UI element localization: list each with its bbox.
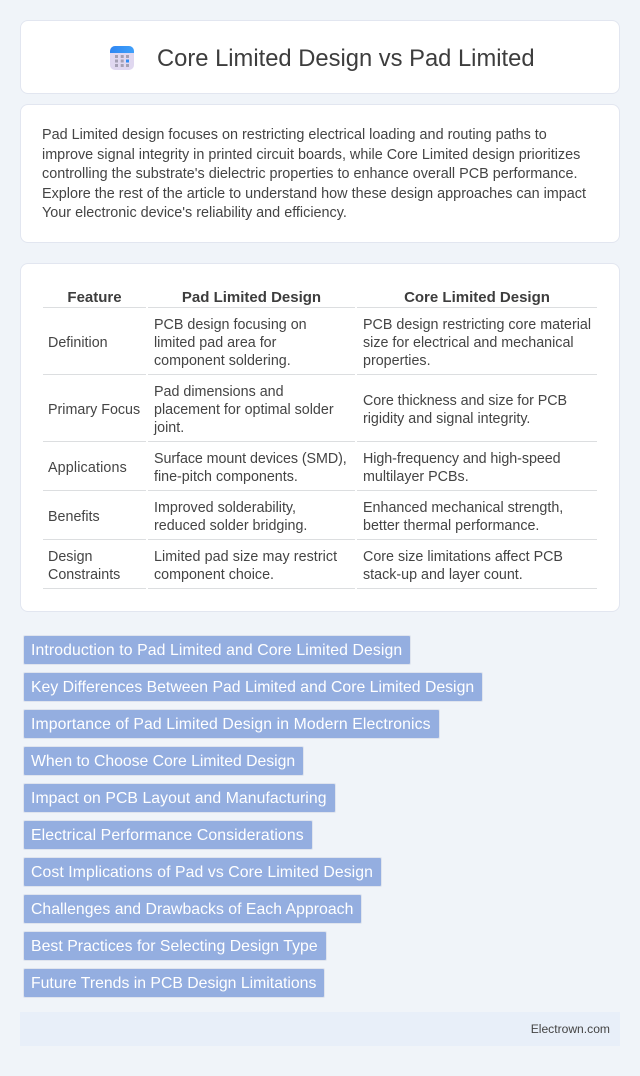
row: primary focus: Primary Focus [48,402,140,418]
intro paragraph: controlling the substrate's dielectric properties to enhance overall PCB performance. [42,166,577,182]
link: when to choose [23,746,304,776]
row: applications: fine-pitch components. [154,469,298,485]
table header: feature: Feature [67,289,122,306]
row: design constraints: component choice. [154,567,274,583]
link: challenges [23,894,362,924]
link: key differences: Key Differences Between Pad Limited and Core Limited Design [31,679,474,696]
row: definition: properties. [363,353,431,369]
row: definition: PCB design restricting core material [363,317,591,333]
link: cost implications: Cost Implications of Pad vs Core Limited Design [31,864,373,881]
row: applications: Applications [48,460,127,476]
row: benefits: Improved solderability, [154,500,296,516]
row: design constraints: Design [48,549,93,565]
header panel [20,20,620,94]
table of contents links [23,635,483,998]
row: definition: size for electrical and mechanical [363,335,574,351]
link: best practices: Best Practices for Selecting Design Type [31,938,318,955]
row: design constraints [48,549,563,583]
intro paragraph: improve signal integrity in printed circuit boards, while Core Limited design prioritizes [42,146,580,162]
row: design constraints: Limited pad size may restrict [154,549,337,565]
row: primary focus: placement for optimal solder [154,402,334,418]
row: applications: Surface mount devices (SMD), [154,451,347,467]
link: introduction: Introduction to Pad Limited and Core Limited Design [31,642,402,659]
link: challenges: Challenges and Drawbacks of Each Approach [31,901,353,918]
row: benefits: Enhanced mechanical strength, [363,500,563,516]
row: definition: component soldering. [154,353,291,369]
footer credit: Electrown.com [531,1022,610,1036]
link: when to choose: When to Choose Core Limited Design [31,753,295,770]
intro paragraph: Explore the rest of the article to understand how these design approaches can impact [42,186,586,202]
link: key differences [23,672,483,702]
row: applications [48,451,560,485]
intro paragraph: Your electronic device's reliability and efficiency. [42,205,347,221]
row: applications: High-frequency and high-speed [363,451,560,467]
row: definition: limited pad area for [154,335,276,351]
row: design constraints: Core size limitations affect PCB [363,549,563,565]
intro paragraph [42,127,586,221]
table header: pad limited design: Pad Limited Design [182,289,321,306]
link: impact [23,783,336,813]
row: design constraints: stack-up and layer count. [363,567,523,583]
link: cost implications [23,857,382,887]
row: benefits: reduced solder bridging. [154,518,307,534]
row: primary focus: Pad dimensions and [154,384,284,400]
link: future trends: Future Trends in PCB Design Limitations [31,975,316,992]
intro text panel [20,104,620,243]
comparison table panel [20,263,620,612]
link: impact: Impact on PCB Layout and Manufacturing [31,790,327,807]
row: design constraints: Constraints [48,567,120,583]
link: electrical performance: Electrical Performance Considerations [31,827,304,844]
link: importance: Importance of Pad Limited Design in Modern Electronics [31,716,431,733]
row: applications: multilayer PCBs. [363,469,469,485]
intro paragraph: Pad Limited design focuses on restricting electrical loading and routing paths to [42,127,547,143]
row: benefits: better thermal performance. [363,518,539,534]
title: Core Limited Design vs Pad Limited [157,45,535,72]
icon: calendar grid [110,46,134,70]
row: primary focus: Core thickness and size for PCB [363,393,567,409]
table header: core limited design: Core Limited Design [404,289,550,306]
row: primary focus: joint. [154,420,184,436]
row: definition: PCB design focusing on [154,317,307,333]
row: definition [48,317,591,369]
footer bar [20,1012,620,1046]
link: electrical performance [23,820,313,850]
row: primary focus [48,384,567,436]
link: future trends [23,968,325,998]
link: introduction [23,635,411,665]
row: primary focus: rigidity and signal integrity. [363,411,530,427]
row: definition: Definition [48,335,108,351]
link: best practices [23,931,327,961]
row: benefits [48,500,563,534]
row: benefits: Benefits [48,509,100,525]
link: importance [23,709,440,739]
